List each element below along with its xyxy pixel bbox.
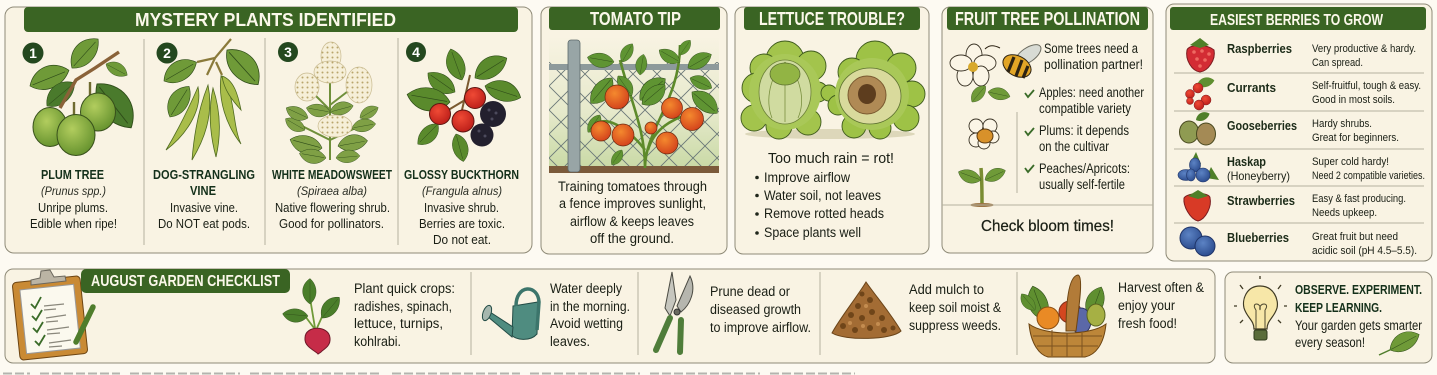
row: gooseberries [1180, 110, 1399, 145]
label: white meadowsweet: Native flowering shrub. [275, 201, 390, 215]
item: watering can: Avoid wetting [550, 316, 623, 331]
label: dog-strangling vine: Do NOT eat pods. [158, 217, 250, 231]
item: radish [282, 278, 455, 354]
item: mulch: suppress weeds. [909, 318, 1001, 333]
label: glossy buckthorn [404, 167, 519, 247]
panel: mystery plants identified [5, 7, 532, 253]
label: plum tree [30, 167, 117, 231]
checklist: fruit varieties: usually self-fertile [1039, 177, 1125, 192]
heading: tomato tip: TOMATO TIP [590, 9, 681, 29]
item: pruners [656, 272, 811, 352]
label: plum tree: Unripe plums. [38, 201, 108, 215]
label: dog-strangling vine: VINE [190, 183, 216, 198]
label: glossy buckthorn: Invasive shrub. [424, 201, 499, 215]
row: strawberries: Easy & fast producing. [1312, 193, 1406, 205]
heading: fruit tree pollination: FRUIT TREE POLLINATION [955, 9, 1140, 29]
label: dog-strangling vine: DOG-STRANGLING [153, 167, 255, 182]
item: mulch: Add mulch to [909, 282, 984, 297]
icon: plum branch [25, 32, 144, 156]
item: radish: Plant quick crops: [354, 281, 455, 296]
row: haskap: Super cold hardy! [1312, 156, 1389, 168]
illustration: tomato plant on chain-link fence [549, 37, 723, 173]
number badge 2 [156, 42, 178, 64]
row: currants: Good in most soils. [1312, 94, 1395, 106]
label: white meadowsweet: WHITE MEADOWSWEET [272, 167, 392, 182]
label: plum tree: (Prunus spp.) [41, 184, 106, 198]
label: glossy buckthorn: (Frangula alnus) [422, 184, 502, 198]
heading: august garden checklist [81, 269, 290, 293]
row: strawberries: Needs upkeep. [1312, 207, 1377, 219]
row: blueberries: Blueberries [1227, 231, 1289, 245]
label: white meadowsweet: (Spiraea alba) [297, 184, 367, 198]
text: tomato tip: Training tomatoes through [558, 179, 707, 194]
number badge 2: 2 [163, 45, 171, 61]
text: lettuce advice: Improve airflow [764, 170, 850, 185]
number badge 1 [22, 42, 44, 64]
row: currants: Currants [1227, 81, 1276, 95]
item: pruners: Prune dead or [710, 284, 790, 299]
text: lettuce advice: Space plants well [764, 225, 861, 240]
label: glossy buckthorn: GLOSSY BUCKTHORN [404, 167, 519, 182]
text: tomato tip: airflow & keeps leaves [570, 214, 694, 229]
row: currants [1186, 75, 1421, 110]
item: pruners: to improve airflow. [710, 320, 811, 335]
row: raspberries: Raspberries [1227, 42, 1292, 56]
icon: blossom and bee [950, 41, 1044, 105]
item: watering can: leaves. [550, 334, 590, 349]
item: harvest basket: fresh food! [1118, 316, 1177, 331]
heading: august garden checklist: AUGUST GARDEN CHECKLIST [91, 273, 280, 290]
item: radish: lettuce, turnips, [354, 316, 443, 331]
item: harvest basket: Harvest often & [1118, 280, 1204, 295]
label: white meadowsweet [272, 167, 392, 231]
text: keep learning message [1295, 282, 1422, 350]
icon: leaf [1379, 326, 1423, 357]
plant 4: glossy buckthorn [404, 42, 524, 247]
row: raspberries [1187, 38, 1416, 72]
label: plum tree: Edible when ripe! [30, 217, 117, 231]
heading: mystery plants [24, 7, 518, 32]
item: radish: radishes, spinach, [354, 299, 452, 314]
checklist: fruit varieties: compatible variety [1039, 101, 1131, 116]
icon: clipboard [12, 270, 93, 360]
number badge 1: 1 [29, 45, 37, 61]
panel: august garden checklist [5, 269, 1215, 363]
item: mulch [832, 282, 1001, 338]
item: radish: kohlrabi. [354, 334, 401, 349]
label: dog-strangling vine: Invasive vine. [170, 201, 238, 215]
plant 3: white meadowsweet [272, 42, 392, 231]
illustration: healthy and rotted lettuce [741, 41, 925, 139]
row: strawberries [1184, 190, 1406, 221]
text: tomato tip: a fence improves sunlight, [559, 196, 706, 211]
row: gooseberries: Great for beginners. [1312, 132, 1399, 144]
icon: vine with pods [159, 39, 268, 160]
label: plum tree: PLUM TREE [41, 167, 104, 182]
text: lettuce advice [755, 150, 894, 240]
row: haskap: Haskap [1227, 155, 1266, 169]
icon: buckthorn berries [405, 46, 524, 163]
text: pollination intro [1044, 41, 1143, 72]
panel: observe experiment keep learning [1225, 272, 1432, 363]
checklist: fruit varieties: on the cultivar [1039, 139, 1109, 154]
text: lettuce advice: Remove rotted heads [764, 206, 884, 221]
number badge 3 [278, 42, 298, 62]
icon: light bulb [1234, 276, 1287, 340]
text: pollination intro: pollination partner! [1044, 57, 1143, 72]
checklist: fruit varieties: Plums: it depends [1039, 123, 1129, 138]
item: harvest basket: enjoy your [1118, 298, 1175, 313]
checklist: fruit varieties: Peaches/Apricots: [1039, 161, 1130, 176]
row: blueberries [1180, 227, 1417, 257]
item: watering can: in the morning. [550, 299, 630, 314]
heading: tomato tip [549, 7, 720, 30]
row: strawberries: Strawberries [1227, 194, 1295, 208]
row: currants: Self-fruitful, tough & easy. [1312, 80, 1421, 92]
row: blueberries: acidic soil (pH 4.5–5.5). [1312, 245, 1417, 257]
number badge 4 [406, 42, 426, 62]
item: harvest basket [1017, 275, 1204, 357]
item: watering can [481, 281, 630, 349]
row: blueberries: Great fruit but need [1312, 231, 1398, 243]
text: lettuce advice: Water soil, not leaves [764, 188, 881, 203]
text: lettuce advice: Too much rain = rot! [768, 150, 894, 167]
plant 2: dog-strangling vine [153, 39, 268, 231]
icon: small blossom and seedling [956, 119, 1008, 207]
panel: tomato tip [541, 7, 727, 254]
heading: easiest berries [1170, 7, 1426, 30]
text: keep learning message: KEEP LEARNING. [1295, 300, 1382, 315]
footer: cropped caption line [3, 372, 855, 374]
text: tomato tip [558, 179, 707, 246]
label: dog-strangling vine [153, 167, 255, 231]
checklist: fruit varieties: Apples: need another [1039, 85, 1144, 100]
icon: meadowsweet [282, 42, 381, 166]
item: pruners: diseased growth [710, 302, 801, 317]
item: watering can: Water deeply [550, 281, 622, 296]
row: gooseberries: Hardy shrubs. [1312, 118, 1372, 130]
number badge 4: 4 [412, 44, 420, 60]
item: mulch: keep soil moist & [909, 300, 1001, 315]
row: haskap [1178, 152, 1425, 183]
row: gooseberries: Gooseberries [1227, 119, 1297, 133]
panel: easiest berries to grow [1166, 4, 1432, 261]
plant 1: plum tree [22, 32, 144, 231]
row: raspberries: Very productive & hardy. [1312, 43, 1416, 55]
row: raspberries: Can spread. [1312, 57, 1363, 69]
text: tomato tip: off the ground. [590, 231, 674, 246]
checklist: fruit varieties [1025, 85, 1144, 192]
panel: lettuce trouble [735, 7, 929, 254]
text: pollination intro: Some trees need a [1044, 41, 1138, 56]
text: keep learning message: every season! [1295, 335, 1365, 350]
heading: easiest berries: EASIEST BERRIES TO GROW [1210, 12, 1384, 29]
panel: fruit tree pollination [942, 7, 1153, 253]
callout: check bloom times: Check bloom times! [981, 218, 1114, 235]
label: glossy buckthorn: Do not eat. [433, 233, 491, 247]
heading: lettuce trouble: LETTUCE TROUBLE? [759, 9, 905, 29]
row: haskap: (Honeyberry) [1227, 169, 1290, 183]
label: glossy buckthorn: Berries are toxic. [419, 217, 505, 231]
heading: mystery plants: MYSTERY PLANTS IDENTIFIED [135, 10, 396, 30]
label: white meadowsweet: Good for pollinators. [279, 217, 384, 231]
number badge 3: 3 [284, 44, 292, 60]
